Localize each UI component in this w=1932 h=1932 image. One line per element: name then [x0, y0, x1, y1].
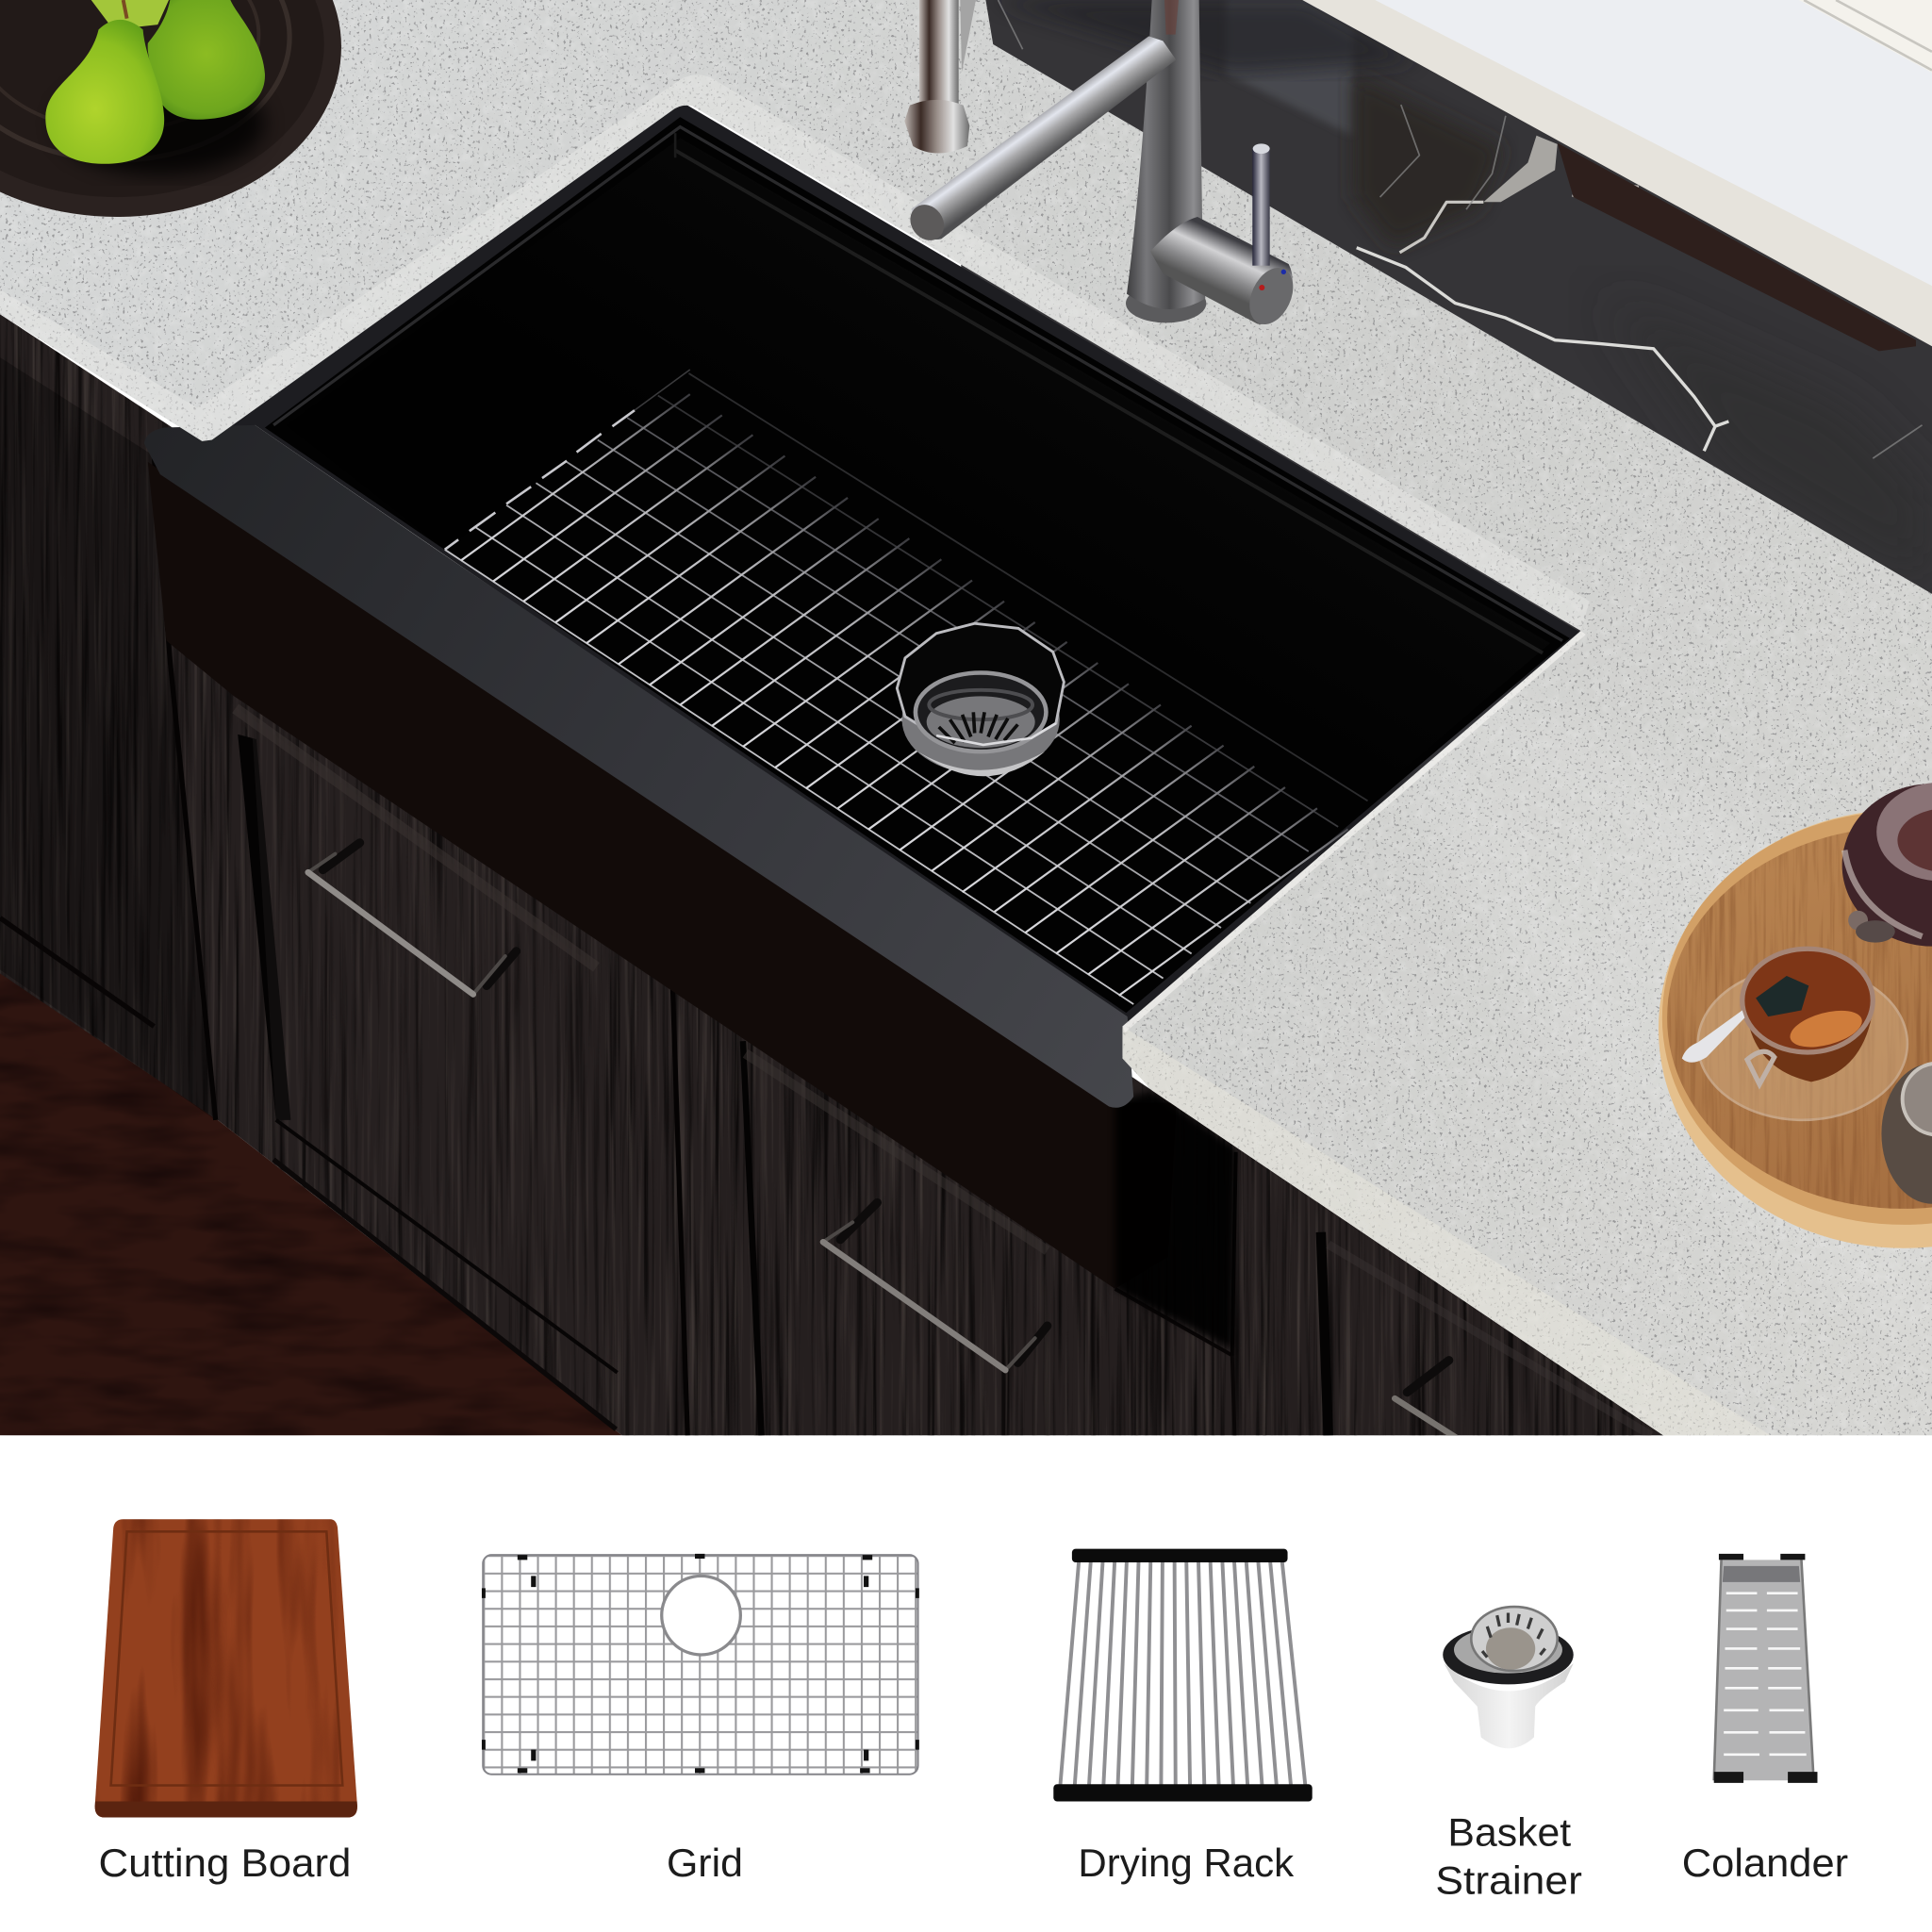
pears: [45, 0, 265, 164]
faucet: [903, 0, 1301, 331]
farmhouse apron front: [148, 462, 1236, 1349]
kitchen photo scene: [0, 0, 1932, 1445]
spout: [903, 36, 1176, 247]
handle 1: [308, 843, 517, 995]
hose and spray head: [904, 0, 976, 154]
teapot: [1842, 783, 1932, 947]
mixer handle: [1150, 143, 1301, 331]
drawer panel 3: [1321, 1232, 1329, 1435]
cross wires: [461, 394, 1348, 996]
label: Basket Strainer: [1435, 1810, 1582, 1902]
left door panel: [0, 357, 216, 1120]
drain and strainer: [897, 623, 1064, 776]
label: Basket Strainer: Basket: [1447, 1810, 1572, 1855]
accessory: grid: [482, 1554, 919, 1775]
accessory: drying rack: [1053, 1549, 1313, 1801]
fruit plate: [0, 0, 341, 217]
handle 3: [1392, 1356, 1458, 1435]
marble veins: [998, 0, 1923, 458]
backsplash: dark marble: [961, 0, 1932, 641]
counter bevel highlights: [0, 74, 1590, 631]
sink rim dark underlay: [197, 101, 1582, 1023]
sink rim band: [144, 425, 1133, 1108]
label: Cutting Board: Cutting Board: [99, 1841, 351, 1885]
label: Basket Strainer: Strainer: [1435, 1858, 1582, 1902]
sink basin: [265, 117, 1570, 1013]
accessory: basket strainer: [1443, 1607, 1574, 1748]
accessory: cutting board: [86, 1513, 363, 1821]
sink grid: [445, 370, 1368, 1004]
label: Drying Rack: Drying Rack: [1078, 1841, 1294, 1885]
label: Grid: Grid: [667, 1841, 743, 1885]
window sill: [1302, 0, 1932, 351]
drawer panel 2: [743, 1041, 762, 1435]
countertop: [0, 0, 1932, 1435]
faucet body: [1126, 0, 1206, 322]
floor: [0, 961, 641, 1442]
long wires: [445, 373, 1368, 1004]
cabinets: [0, 308, 1676, 1442]
tea cup and saucer: [1682, 949, 1907, 1120]
accessory: colander: [1714, 1554, 1817, 1783]
drawer panel 1: [238, 735, 290, 1120]
tea tray: [1659, 783, 1932, 1248]
label: Colander: Colander: [1682, 1841, 1848, 1885]
glass jar: [1881, 1064, 1932, 1204]
handle 2: [823, 1202, 1048, 1370]
outer dashed wire: [445, 410, 635, 550]
